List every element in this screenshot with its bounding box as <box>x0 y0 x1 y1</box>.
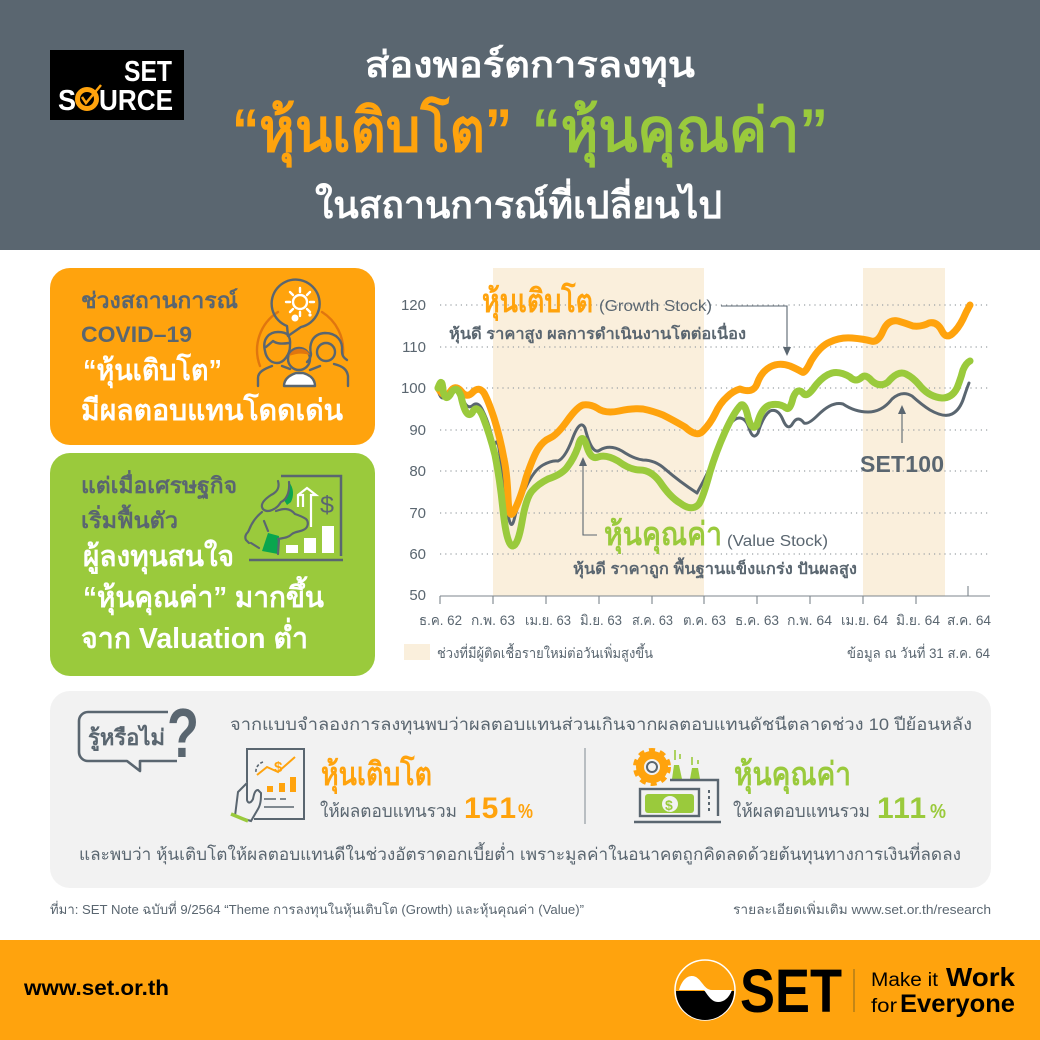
legend: ช่วงที่มีผู้ติดเชื้อรายใหม่ต่อวันเพิ่มสูงขึ้น <box>437 643 653 662</box>
footer band <box>0 940 1040 1040</box>
panel: recovery value stock: “หุ้นคุณค่า” มากขึ้น <box>83 575 324 615</box>
logo: SET Source: URCE <box>99 85 173 117</box>
y axis labels: 60 <box>409 546 426 563</box>
callout: SET100: SET100 <box>860 451 944 477</box>
x axis labels: ส.ค. 63 <box>632 612 673 628</box>
title: “หุ้นเติบโต” <box>232 95 512 168</box>
panel: recovery value stock <box>50 453 375 676</box>
y axis labels: 110 <box>402 339 426 356</box>
panel: recovery value stock: จาก Valuation ต่ำ <box>81 617 308 655</box>
more info note: รายละเอียดเพิ่มเติม www.set.or.th/research <box>733 901 991 917</box>
stat: value stock: 111 <box>877 792 926 825</box>
source note: ที่มา: SET Note ฉบับที่ 9/2564 “Theme การลงทุนในหุ้นเติบโต (Growth) และหุ้นคุณค่า (Value)” <box>50 901 584 918</box>
x axis labels: มิ.ย. 63 <box>580 612 622 628</box>
text: conclusion: และพบว่า หุ้นเติบโตให้ผลตอบแทนดีในช่วงอัตราดอกเบี้ยต่ำ เพราะมูลค่าในอนาคตถูกคิดลดด้วยต้นทุนทางการเงินที่ลดลง <box>79 842 961 865</box>
panel: covid growth stock: COVID–19 <box>81 322 192 347</box>
x axis labels: ธ.ค. 63 <box>735 612 779 628</box>
stat: value stock <box>733 756 946 825</box>
callout: SET100 <box>860 405 944 477</box>
x axis labels: ก.พ. 63 <box>471 612 515 628</box>
panel: recovery value stock: เริ่มฟื้นตัว <box>81 504 178 533</box>
panel: covid growth stock: ช่วงสถานการณ์ <box>81 288 238 313</box>
callout: value stock: (Value Stock) <box>727 533 828 550</box>
logo: SET <box>675 957 1016 1025</box>
callout: growth stock: หุ้นเติบโต <box>482 282 593 322</box>
logo: SET Source: SET <box>124 56 172 88</box>
callout: value stock: หุ้นดี ราคาถูก พื้นฐานแข็งแกร่ง ปันผลสูง <box>573 557 857 580</box>
title <box>232 44 828 227</box>
x axis labels: ต.ค. 63 <box>683 612 726 628</box>
legend: ข้อมูล ณ วันที่ 31 ส.ค. 64 <box>847 644 990 662</box>
panel: recovery value stock: ผู้ลงทุนสนใจ <box>83 539 234 574</box>
x axis labels <box>419 612 991 628</box>
stat: growth stock: ให้ผลตอบแทนรวม <box>320 800 457 821</box>
y axis labels: 70 <box>409 505 426 522</box>
callout: value stock: หุ้นคุณค่า <box>604 516 722 555</box>
title: ในสถานการณ์ที่เปลี่ยนไป <box>315 178 722 227</box>
icon: bull and rising chart: $ <box>320 492 334 519</box>
legend <box>404 643 990 662</box>
logo: SET: Make it <box>871 970 939 991</box>
logo: SET: for <box>871 996 898 1017</box>
callout: growth stock: (Growth Stock) <box>599 298 712 315</box>
stat: growth stock: % <box>518 801 533 823</box>
icon: speech bubble with question mark <box>79 694 199 772</box>
stat: value stock: หุ้นคุณค่า <box>734 756 851 795</box>
panel: recovery value stock: แต่เมื่อเศรษฐกิจ <box>81 469 237 500</box>
callout: growth stock: หุ้นดี ราคาสูง ผลการดำเนินงานโตต่อเนื่อง <box>449 322 746 345</box>
line: value stock <box>438 361 970 546</box>
y axis labels: 50 <box>409 587 426 604</box>
stat: growth stock <box>320 755 533 825</box>
text: intro: จากแบบจำลองการลงทุนพบว่าผลตอบแทนส่วนเกินจากผลตอบแทนดัชนีตลาดช่วง 10 ปีย้อนหลัง <box>230 715 972 735</box>
y axis labels <box>401 297 426 604</box>
x axis labels: ธ.ค. 62 <box>419 612 462 628</box>
shaded periods <box>493 268 945 596</box>
x axis labels: เม.ย. 64 <box>841 612 888 628</box>
logo: SET: Work <box>946 962 1016 992</box>
title: ส่องพอร์ตการลงทุน <box>365 44 695 88</box>
title: “หุ้นคุณค่า” <box>532 97 828 168</box>
icon: speech bubble with question mark: ? <box>167 694 199 772</box>
stat: growth stock: 151 <box>464 792 516 825</box>
icon: report in hand <box>231 749 304 821</box>
panel: covid growth stock: มีผลตอบแทนโดดเด่น <box>81 392 343 427</box>
panel: did you know <box>50 691 991 888</box>
icon: report in hand: $ <box>274 759 283 776</box>
logo: SET Source <box>50 50 184 120</box>
header band <box>0 0 1040 250</box>
icon: speech bubble with question mark: รู้หรือไม่ <box>88 724 165 752</box>
stat: growth stock: หุ้นเติบโต <box>321 755 432 795</box>
x axis labels: เม.ย. 63 <box>525 612 571 628</box>
y axis labels: 90 <box>409 422 426 439</box>
callout: value stock <box>573 457 857 580</box>
stat: value stock: % <box>930 801 946 823</box>
icon: bull and rising chart <box>245 476 343 560</box>
panel: covid growth stock: “หุ้นเติบโต” <box>83 352 222 388</box>
icon: people with idea bubble <box>257 280 348 386</box>
line: SET100 <box>438 383 969 524</box>
icon: factory, gear and banknote: $ <box>665 797 673 813</box>
y axis labels: 80 <box>409 463 426 480</box>
x axis labels: ส.ค. 64 <box>947 612 991 628</box>
y axis labels: 100 <box>401 380 426 397</box>
x axis labels: ก.พ. 64 <box>787 612 832 628</box>
x axis labels: มิ.ย. 64 <box>896 612 940 628</box>
panel: covid growth stock <box>50 268 375 445</box>
line: growth stock <box>438 305 970 514</box>
stat: value stock: ให้ผลตอบแทนรวม <box>733 800 870 821</box>
website: www.set.or.th <box>23 977 169 1000</box>
icon: factory, gear and banknote <box>634 750 721 822</box>
logo: SET: Everyone <box>900 990 1015 1018</box>
y axis labels: 120 <box>401 297 426 314</box>
callout: growth stock <box>449 282 791 356</box>
line chart <box>401 268 991 662</box>
logo: SET: SET <box>740 957 842 1025</box>
logo: SET Source: S <box>58 85 76 117</box>
